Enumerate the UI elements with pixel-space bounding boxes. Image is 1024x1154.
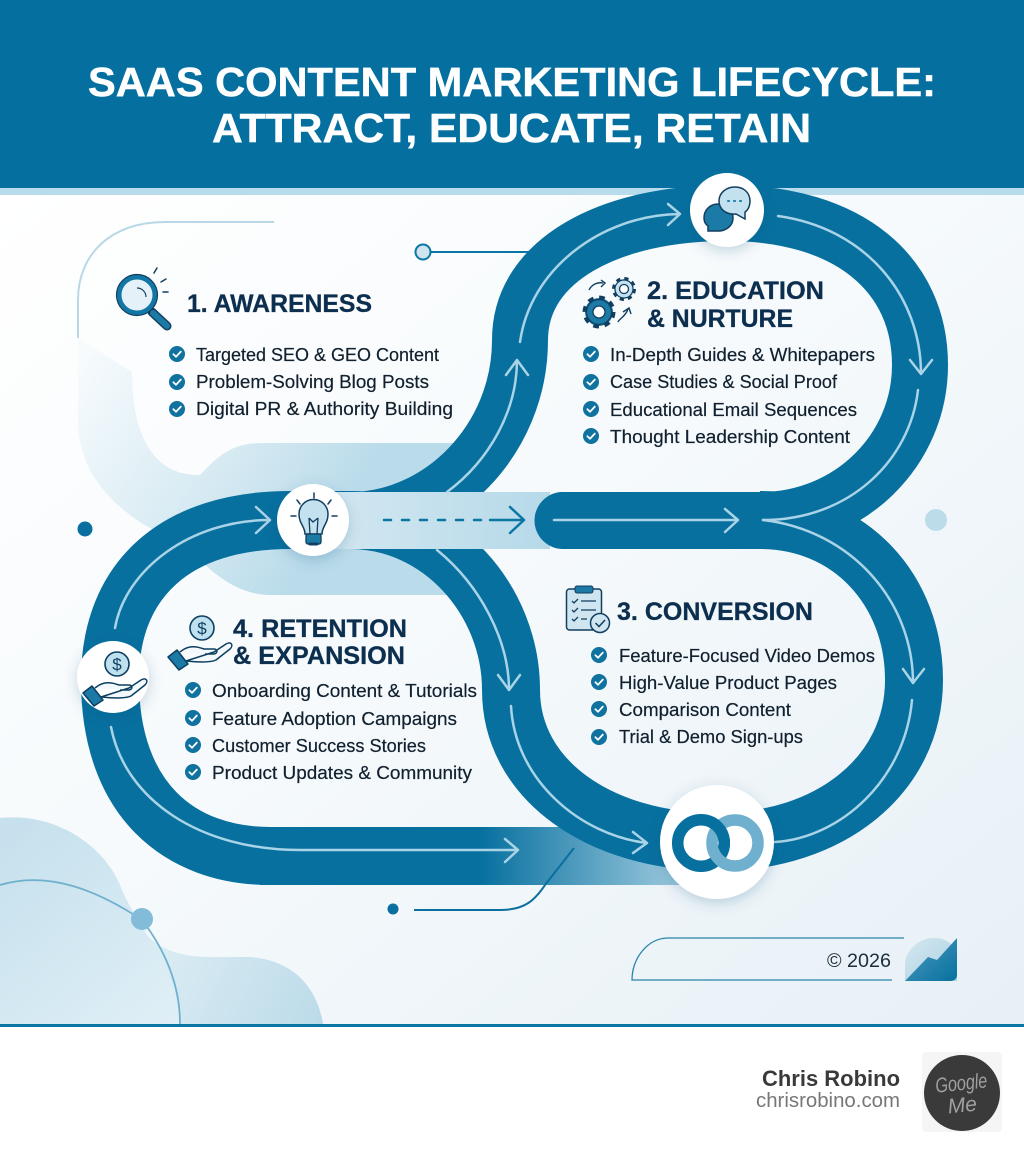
track: conversion loop	[350, 520, 914, 842]
bullet list: Trial & Demo Sign-ups	[619, 726, 803, 747]
author name: Chris Robino	[762, 1066, 900, 1091]
bullet list: Product Updates & Community	[212, 762, 473, 783]
heading: & EXPANSION	[233, 642, 405, 670]
bullet list: Feature-Focused Video Demos	[619, 645, 875, 666]
panel: retention and expansion	[168, 615, 477, 783]
heading: 3. CONVERSION	[617, 598, 813, 626]
bullet list: Thought Leadership Content	[610, 426, 850, 447]
heading: 1. AWARENESS	[187, 290, 372, 318]
bullet list	[591, 645, 875, 747]
bullet list	[583, 344, 875, 447]
author avatar: Me	[947, 1093, 978, 1118]
copyright frame: © 2026	[827, 951, 891, 972]
author name	[756, 1066, 900, 1112]
bullet list: Educational Email Sequences	[610, 399, 857, 420]
heading	[647, 277, 824, 333]
heading: 4. RETENTION	[233, 615, 407, 643]
bullet list: Digital PR & Authority Building	[196, 398, 453, 419]
page background	[0, 195, 1024, 1025]
node: hand with coin	[77, 641, 149, 713]
bullet list	[169, 344, 453, 419]
pale connector band	[333, 492, 550, 549]
accent dots	[78, 509, 947, 536]
panel: education and nurture	[583, 277, 875, 447]
author avatar: Google	[934, 1069, 988, 1098]
background shape: bottom-left blob	[0, 817, 323, 1024]
bullet list: Comparison Content	[619, 699, 791, 720]
panel: conversion	[566, 586, 875, 747]
title: ATTRACT, EDUCATE, RETAIN	[212, 105, 811, 151]
track: education loop	[350, 213, 920, 520]
pill cap	[534, 492, 780, 549]
dashed arrow	[384, 507, 524, 533]
outline arc top left	[78, 222, 274, 338]
flow arrows	[111, 204, 932, 862]
bullet list: In-Depth Guides & Whitepapers	[610, 344, 875, 365]
node: linked rings	[660, 785, 774, 899]
bullet list: Case Studies & Social Proof	[610, 371, 838, 392]
bullet list: Problem-Solving Blog Posts	[196, 371, 429, 392]
connector line bottom	[388, 848, 574, 914]
decorative arc with node	[0, 880, 180, 1024]
heading	[233, 615, 407, 670]
fading retention band	[260, 827, 700, 885]
bullet list: Feature Adoption Campaigns	[212, 708, 457, 729]
track: retention loop	[110, 520, 350, 856]
icon: gears	[585, 279, 634, 326]
footer divider	[0, 1024, 1024, 1027]
background shape: pale swoosh behind the bulb	[78, 338, 470, 595]
icon: corner logo	[905, 938, 957, 981]
bullet list: Targeted SEO & GEO Content	[196, 344, 439, 365]
title: SAAS CONTENT MARKETING LIFECYCLE:	[88, 59, 936, 105]
bullet list: Customer Success Stories	[212, 735, 426, 756]
connector node top	[416, 244, 550, 260]
author avatar	[922, 1052, 1002, 1132]
title	[88, 59, 936, 151]
heading: & NURTURE	[647, 305, 793, 333]
header banner	[0, 0, 1024, 195]
node: chat bubbles	[690, 173, 764, 247]
node: lightbulb	[277, 484, 349, 556]
icon: hand with coin	[168, 616, 232, 670]
heading: 2. EDUCATION	[647, 277, 824, 305]
icon: magnifier	[116, 268, 168, 326]
bullet list: Onboarding Content & Tutorials	[212, 680, 477, 701]
panel: awareness	[116, 268, 453, 419]
author name: chrisrobino.com	[756, 1090, 900, 1112]
bullet list	[185, 680, 477, 783]
copyright frame	[632, 938, 904, 980]
bullet list: High-Value Product Pages	[619, 672, 837, 693]
icon: clipboard	[566, 586, 610, 632]
